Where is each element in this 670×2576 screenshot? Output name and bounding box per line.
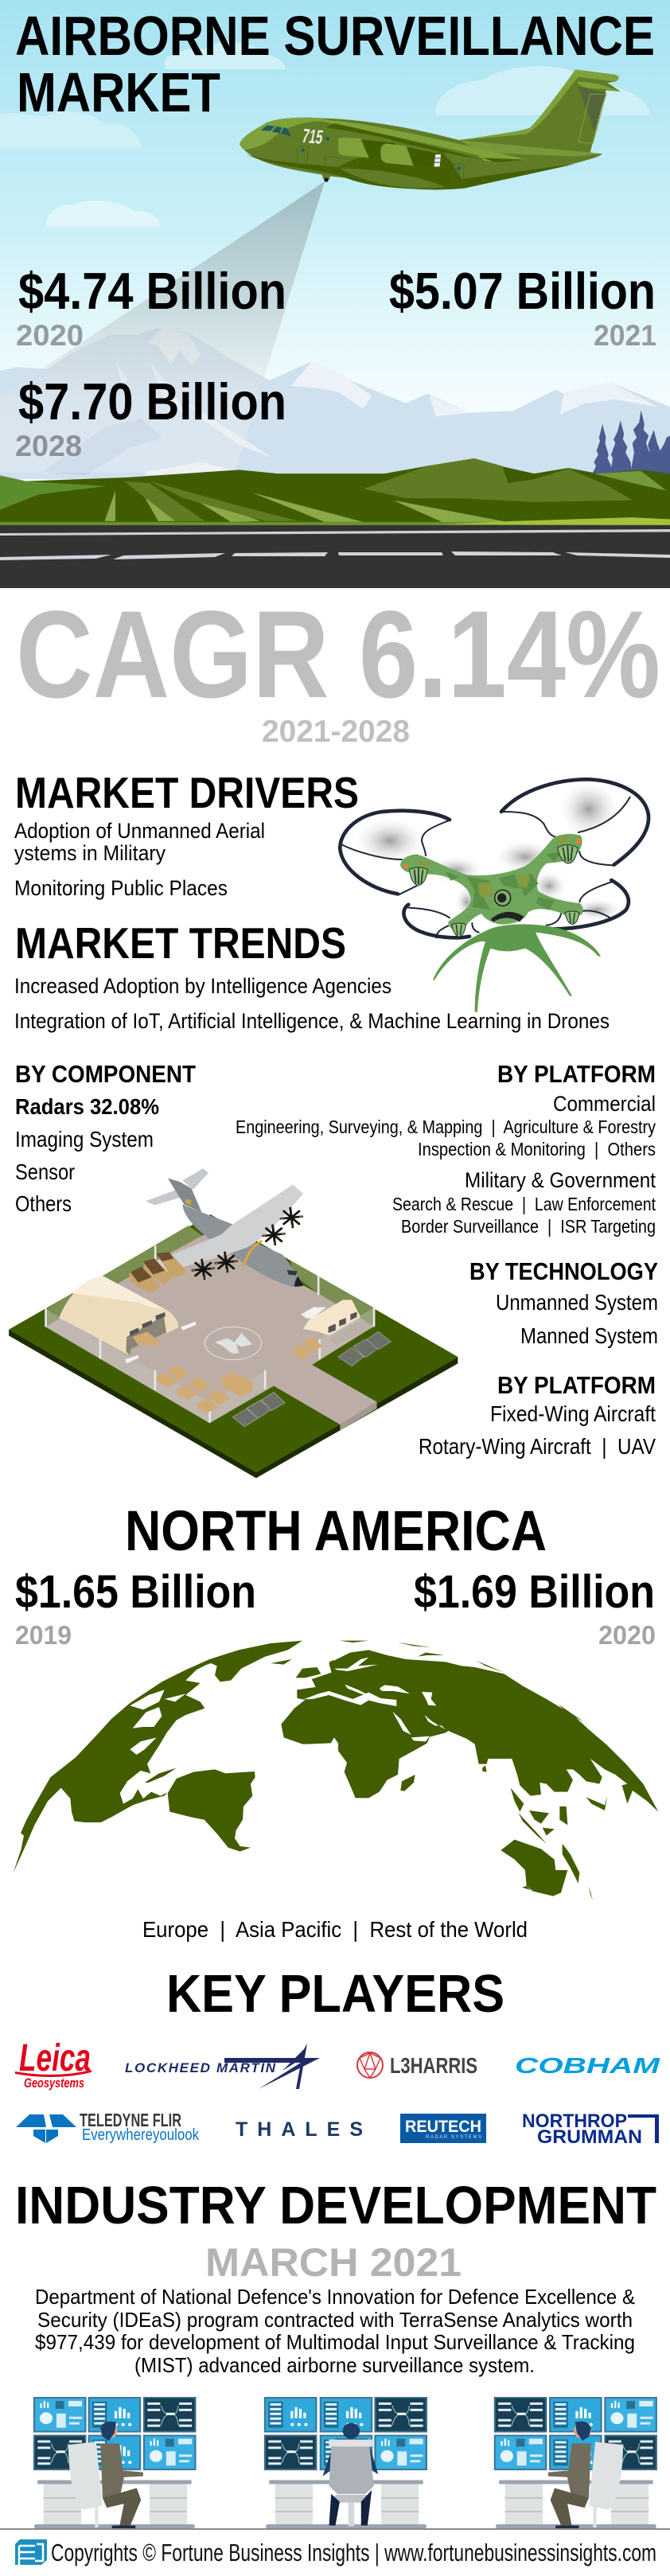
stat: 2020 value xyxy=(16,262,286,352)
segment: by platform type: BY PLATFORM xyxy=(497,1371,656,1399)
runway xyxy=(0,525,670,588)
military vehicles xyxy=(125,1252,322,1413)
date: MARCH 2021 xyxy=(205,2240,462,2285)
stat: 2021 value: 2021 xyxy=(594,319,656,352)
logo: Teledyne FLIR: Everywhereyoulook xyxy=(82,2126,200,2144)
segment: by component: BY COMPONENT xyxy=(15,1060,196,1088)
segment: by component xyxy=(15,1060,196,1216)
trees xyxy=(592,410,670,474)
helipad xyxy=(205,1327,262,1360)
stat: 2021 value xyxy=(389,262,656,352)
world map xyxy=(14,1641,658,1900)
americas xyxy=(14,1641,334,1873)
segment: by component: Radars 32.08% xyxy=(15,1094,159,1119)
segment: by platform: BY PLATFORM xyxy=(497,1060,656,1088)
logo: L3Harris xyxy=(357,2052,477,2078)
heading: key players: KEY PLAYERS xyxy=(166,1964,504,2024)
eurasia and africa xyxy=(281,1641,658,1900)
back fence xyxy=(45,1226,203,1327)
ground slab xyxy=(9,1330,458,1478)
segment: by platform type xyxy=(419,1371,656,1459)
mountains xyxy=(0,327,670,479)
operator center xyxy=(265,2398,427,2528)
other regions: Europe | Asia Pacific | Rest of the World xyxy=(142,1917,528,1942)
logos xyxy=(15,2037,660,2148)
hero: airfield scene xyxy=(0,0,670,588)
logo: Cobham: COBHAM xyxy=(515,2053,660,2078)
drone illustration xyxy=(340,779,649,1012)
stat: 2028 value: $7.70 Billion xyxy=(18,372,286,431)
logo: Reutech xyxy=(400,2114,486,2143)
stat: 2020 value: 2020 xyxy=(16,319,84,352)
trends list: Integration of IoT, Artificial Intelligence, & Machine Learning in Drones xyxy=(14,1009,610,1033)
operator left xyxy=(34,2398,195,2529)
logo: Reutech: REUTECH xyxy=(405,2118,481,2136)
logo: Leica xyxy=(15,2037,92,2091)
segment: by component: Others xyxy=(15,1191,72,1216)
surveillance beam xyxy=(0,181,325,473)
stat: 2019 value: $1.65 Billion xyxy=(15,1566,256,1618)
logo: Thales: THALES xyxy=(236,2118,363,2141)
operators xyxy=(34,2398,656,2529)
stat: 2019 value: 2019 xyxy=(15,1620,72,1650)
stat: 2020 value xyxy=(414,1566,656,1650)
development description xyxy=(35,2285,635,2377)
logo: Leica: Leica xyxy=(19,2037,91,2079)
apron xyxy=(45,1233,377,1424)
stat: 2020 value: 2020 xyxy=(598,1620,656,1650)
segment: by platform xyxy=(236,1060,656,1237)
segment: by component: Sensor xyxy=(15,1159,75,1184)
rotor guards xyxy=(340,779,649,937)
green hills xyxy=(0,458,670,527)
small hangar xyxy=(301,1300,376,1345)
airbase illustration xyxy=(9,1168,458,1478)
logo: Lockheed Martin: LOCKHEED MARTIN xyxy=(125,2060,276,2075)
development description: $977,439 for development of Multimodal Input Surveillance & Tracking xyxy=(35,2330,635,2354)
large hangar xyxy=(59,1276,178,1355)
development description: Security (IDEaS) program contracted with TerraSense Analytics worth xyxy=(37,2308,633,2332)
stat: 2019 value xyxy=(15,1566,256,1650)
segment: by component: Imaging System xyxy=(15,1127,154,1152)
drivers list: Monitoring Public Places xyxy=(14,876,228,900)
logo: Northrop Grumman: GRUMMAN xyxy=(537,2126,642,2148)
clouds xyxy=(0,42,650,227)
CAGR period: 2021-2028 xyxy=(262,715,410,749)
stat: 2028 value: 2028 xyxy=(15,430,82,462)
segment: by technology xyxy=(469,1257,658,1348)
footer xyxy=(0,2528,670,2566)
landing legs xyxy=(433,924,601,1012)
drivers list xyxy=(14,819,265,900)
trends list xyxy=(14,974,610,1033)
heading: market drivers: MARKET DRIVERS xyxy=(15,768,359,817)
cargo aircraft xyxy=(146,1168,303,1287)
development description: Department of National Defence's Innovation for Defence Excellence & xyxy=(35,2285,635,2309)
title: MARKET xyxy=(17,61,220,123)
logo: Leica: Geosystems xyxy=(24,2075,84,2091)
logo: Teledyne FLIR xyxy=(16,2110,200,2144)
aircraft xyxy=(240,69,621,190)
heading: market trends: MARKET TRENDS xyxy=(15,918,346,968)
logo: Teledyne FLIR: TELEDYNE FLIR xyxy=(80,2110,181,2130)
aircraft: 715 xyxy=(301,126,325,149)
logo: Reutech: RADAR SYSTEMS xyxy=(426,2135,481,2140)
front fence xyxy=(45,1307,374,1423)
drone body xyxy=(400,834,583,937)
drivers list: Adoption of Unmanned Aerial xyxy=(14,819,265,843)
propeller blur xyxy=(356,781,621,921)
solar panels xyxy=(232,1331,391,1427)
drivers list: ystems in Military xyxy=(14,841,166,865)
sky background xyxy=(0,0,670,477)
title xyxy=(15,5,655,123)
logo: L3Harris: L3HARRIS xyxy=(390,2053,477,2078)
development description: (MIST) advanced airborne surveillance system. xyxy=(134,2353,535,2377)
trends list: Increased Adoption by Intelligence Agencies xyxy=(14,974,391,998)
heading: north america: NORTH AMERICA xyxy=(125,1500,547,1563)
footer logo xyxy=(15,2539,47,2565)
logo: Northrop Grumman xyxy=(522,2110,659,2148)
logo: Lockheed Martin xyxy=(125,2044,320,2089)
stat: 2028 value xyxy=(15,372,286,462)
logo: Northrop Grumman: NORTHROP xyxy=(522,2110,627,2132)
stat: 2020 value: $4.74 Billion xyxy=(18,262,286,320)
fence posts xyxy=(45,1245,375,1423)
operator right xyxy=(495,2398,656,2529)
segment: by platform: Commercial xyxy=(553,1092,656,1116)
